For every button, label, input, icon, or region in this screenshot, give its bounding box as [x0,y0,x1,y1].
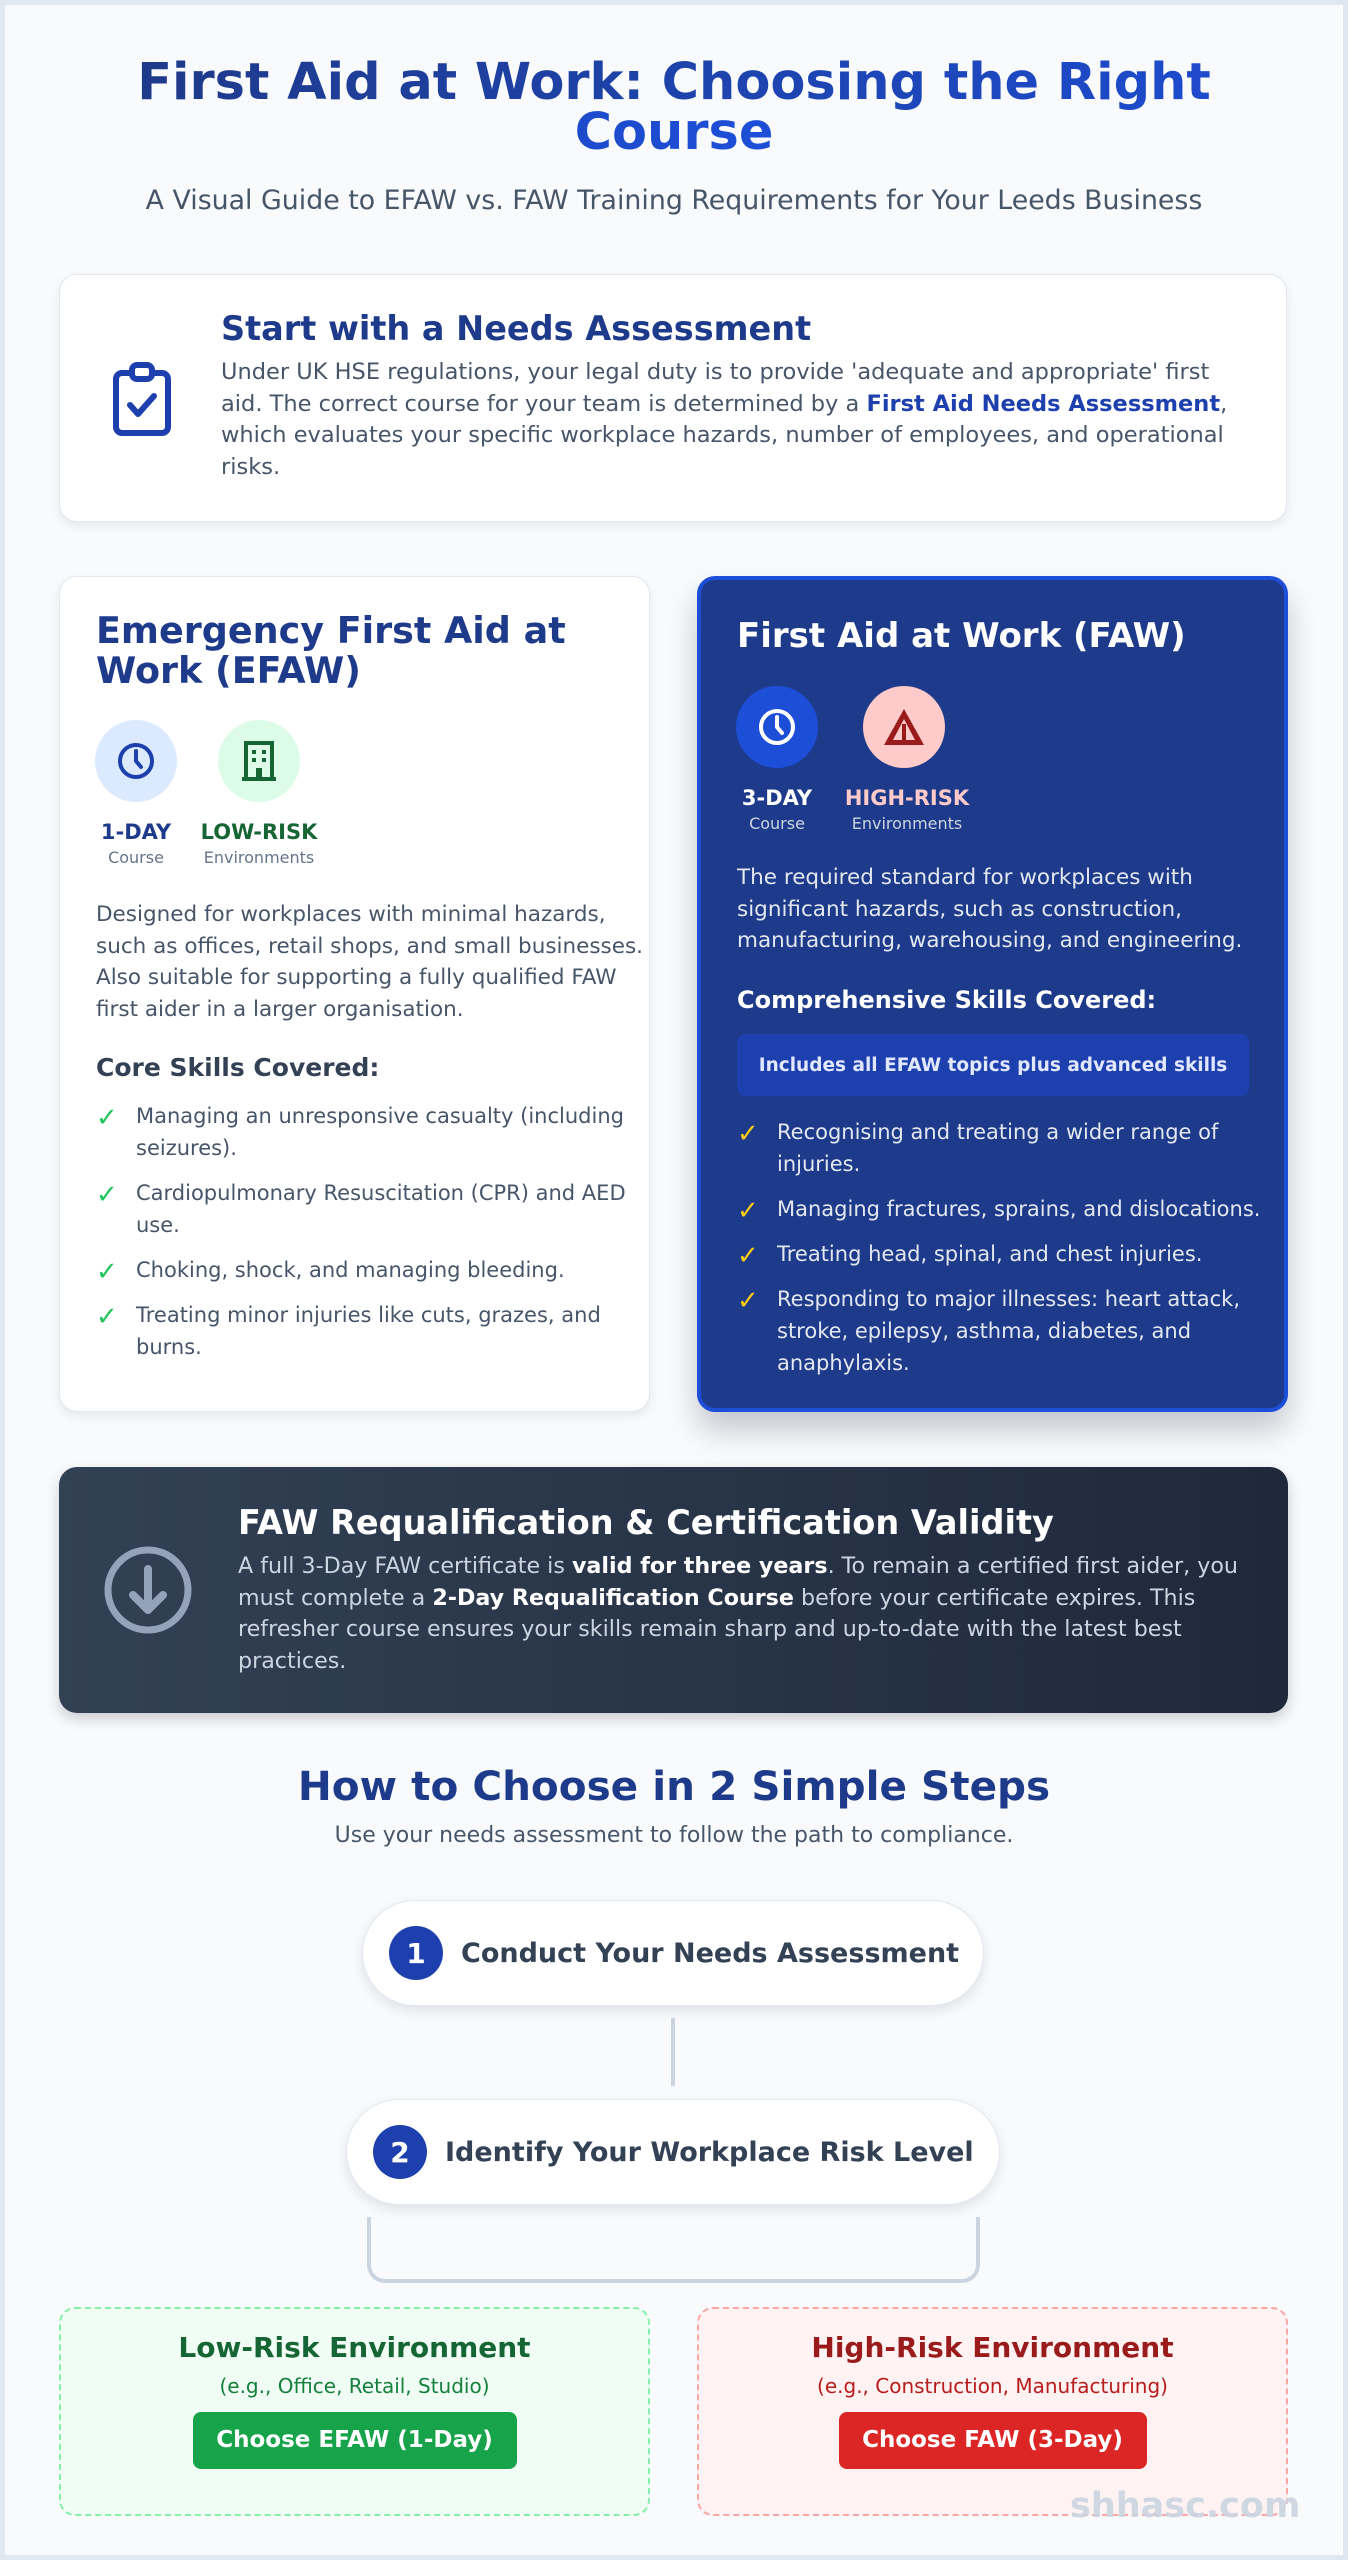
icon: warning [863,686,945,768]
step 1: 1 [406,1936,426,1970]
core skills heading: Core Skills Covered: [96,1053,379,1082]
subtitle: A Visual Guide to EFAW vs. FAW Training Requirements for Your Leeds Business [146,185,1202,216]
heading: FAW Requalification & Certification Validity [238,1503,1054,1542]
button [838,2412,1146,2469]
stat labels: 1-DAY [101,820,171,844]
skills list: Responding to major illnesses: heart attack, stroke, epilepsy, asthma, diabetes, and anaphylaxis. [777,1287,1240,1375]
description: Designed for workplaces with minimal hazards, such as offices, retail shops, and small businesses. Also suitable for supporting a fully qualified FAW first aider in a larger organisation. [96,902,643,1022]
stat labels: Course [749,814,805,833]
skills list: Managing fractures, sprains, and dislocations. [777,1197,1260,1221]
step 1 [362,1900,984,2006]
icon: clock [95,720,177,802]
button: Choose EFAW (1-Day) [216,2427,493,2453]
panel: FAW: Environments [852,814,962,833]
icon: building [218,720,300,802]
heading: First Aid at Work (FAW) [737,616,1186,656]
skills list: ✓ [737,1119,759,1149]
connector [671,2018,675,2086]
skills list: ✓ [96,1103,118,1133]
panel: low risk [59,2307,650,2516]
panel: needs assessment [59,274,1287,522]
body: A full 3-Day FAW certificate is valid for three years. To remain a certified first aider, you must complete a 2-Day Requalification Course before your certificate expires. This refresher course ensures your skills remain sharp and up-to-date with the latest best practices. [238,1553,1238,1674]
examples: (e.g., Office, Retail, Studio) [219,2374,490,2398]
skills list: Choking, shock, and managing bleeding. [136,1258,565,1282]
skills list [737,1119,1260,1375]
stat labels [101,820,172,867]
skills list: ✓ [737,1286,759,1316]
body text: Under UK HSE regulations, your legal duty is to provide 'adequate and appropriate' first aid. The correct course for your team is determined by a First Aid Needs Assessment, which evaluates your specific workplace hazards, number of employees, and operational risks. [221,359,1227,480]
skills list: ✓ [737,1196,759,1226]
skills list: Treating head, spinal, and chest injuries. [777,1242,1202,1266]
examples: (e.g., Construction, Manufacturing) [817,2374,1168,2398]
panel: FAW [697,576,1288,1412]
icon: clipboard [113,362,171,436]
title: First Aid at Work: Choosing the Right Course [137,53,1211,162]
step 2: Identify Your Workplace Risk Level [445,2136,974,2168]
skills list: ✓ [737,1241,759,1271]
heading: how to choose: How to Choose in 2 Simple Steps [298,1762,1050,1810]
stat labels [742,786,812,833]
skills list: Recognising and treating a wider range of injuries. [777,1120,1218,1176]
skills list: ✓ [96,1302,118,1332]
button: Choose FAW (3-Day) [862,2427,1123,2453]
step 2: 2 [390,2136,410,2168]
heading: Low-Risk Environment [178,2331,531,2364]
panel: high risk [697,2307,1288,2516]
banner: Includes all EFAW topics plus advanced skills [759,1054,1227,1076]
stat labels: 3-DAY [742,786,812,810]
subheading: Use your needs assessment to follow the path to compliance. [335,1823,1013,1848]
panel: EFAW: LOW-RISK [201,820,317,844]
banner [737,1034,1249,1096]
panel: EFAW [59,576,650,1412]
heading: Start with a Needs Assessment [221,309,811,348]
skills list: Treating minor injuries like cuts, grazes, and burns. [136,1303,601,1359]
bracket connector [367,2217,980,2283]
panel: EFAW: Environments [204,848,314,867]
comprehensive heading: Comprehensive Skills Covered: [737,986,1156,1014]
skills list: Cardiopulmonary Resuscitation (CPR) and AED use. [136,1181,626,1237]
icon: clock [736,686,818,768]
skills list: ✓ [96,1257,118,1287]
step 2 [346,2099,1000,2205]
icon: down arrow circle [104,1546,192,1634]
skills list: Managing an unresponsive casualty (including seizures). [136,1104,624,1160]
watermark: shhasc.com [1070,2486,1300,2526]
skills list: ✓ [96,1180,118,1210]
panel: FAW: HIGH-RISK [845,786,969,810]
skills list [96,1103,626,1359]
step 1: Conduct Your Needs Assessment [461,1938,959,1968]
heading: High-Risk Environment [811,2331,1174,2364]
description: The required standard for workplaces with significant hazards, such as construction, manufacturing, warehousing, and engineering. [737,865,1242,953]
button [192,2412,516,2469]
panel: requalification [59,1467,1288,1713]
heading: Emergency First Aid at Work (EFAW) [96,609,566,692]
stat labels: Course [108,848,164,867]
